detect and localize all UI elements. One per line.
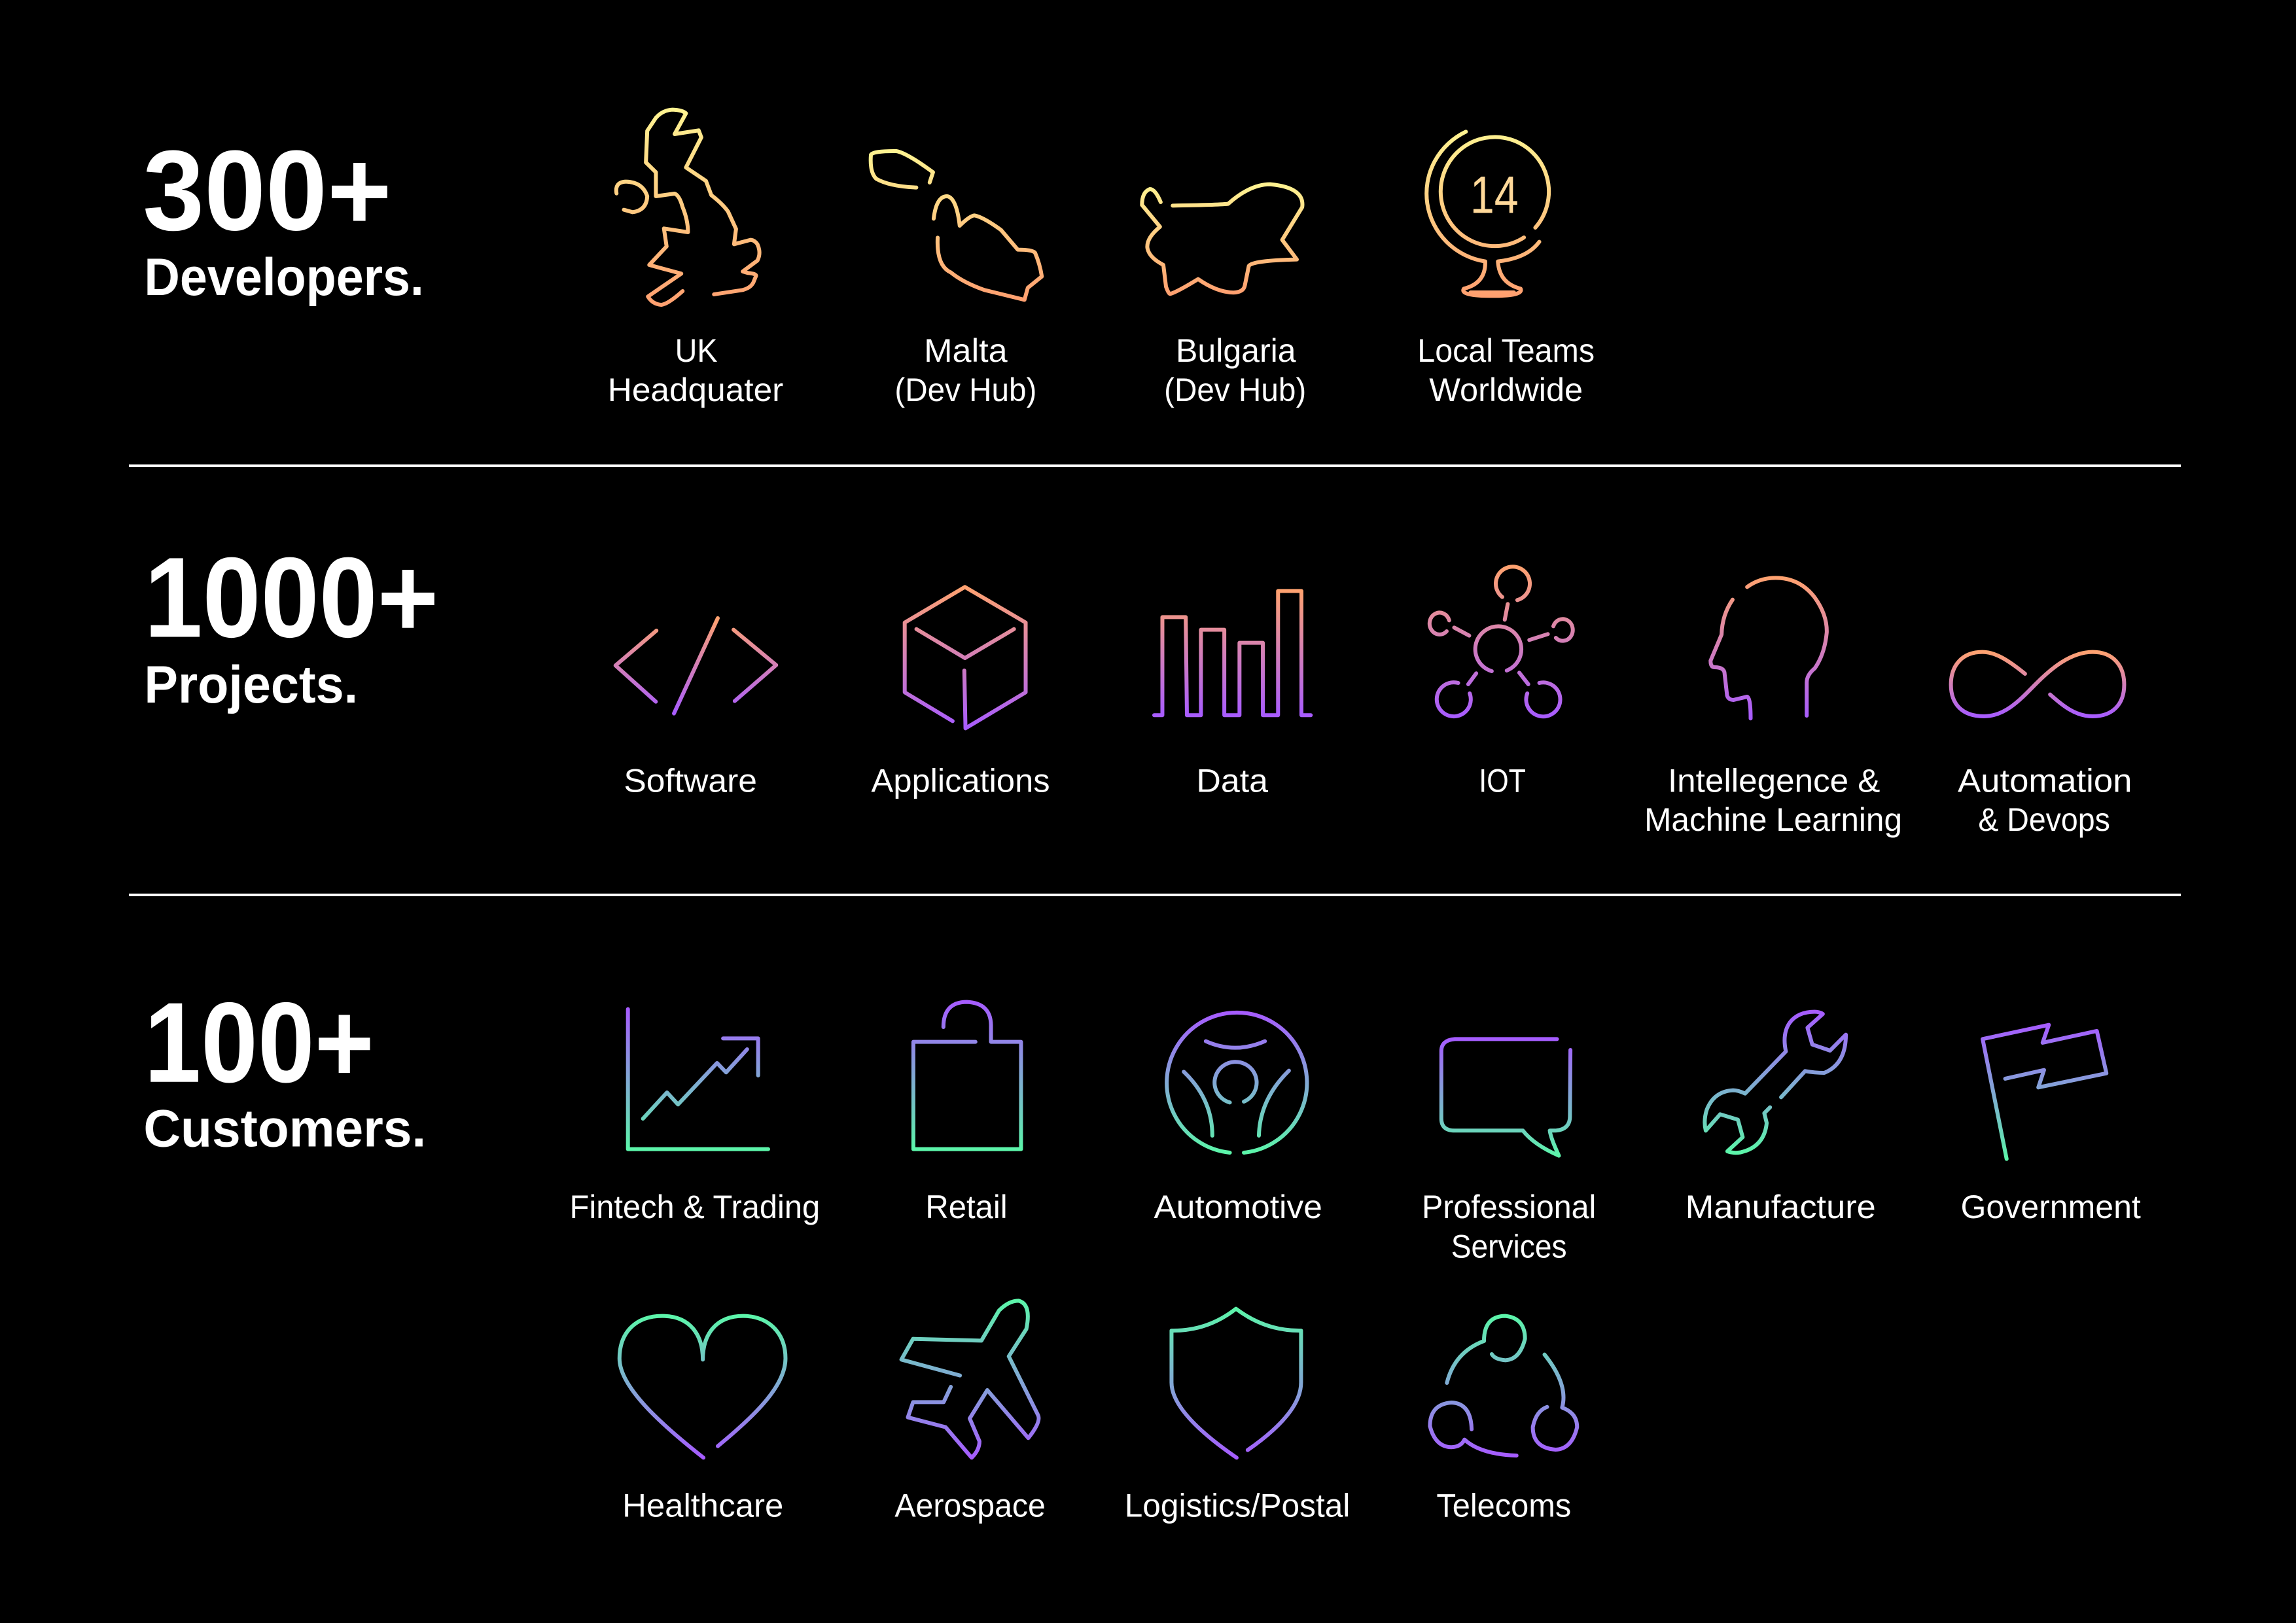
- label: Professional Services: Services: [1451, 1228, 1567, 1265]
- label: Malta (Dev Hub): Malta: [924, 332, 1008, 369]
- icon: flag: [1983, 1025, 2106, 1159]
- heading: Developers.: Developers.: [144, 248, 424, 307]
- icon: globe with 14: 14: [1470, 166, 1519, 225]
- label: UK Headquater: UK: [675, 332, 718, 369]
- label: Software: Software: [624, 763, 757, 799]
- icon: shopping bag: [913, 1002, 1021, 1149]
- heading: 1000+: 1000+: [144, 533, 438, 661]
- label: IOT: IOT: [1479, 763, 1526, 799]
- label: Intellegence & Machine Learning: Intellegence &: [1668, 763, 1880, 799]
- label: Local Teams Worldwide: [1417, 332, 1595, 408]
- icon: UK map: [616, 110, 760, 305]
- section: developers: [143, 110, 1595, 408]
- label: Local Teams Worldwide: Local Teams: [1417, 332, 1595, 369]
- divider: [129, 894, 2181, 896]
- label: Data: Data: [1196, 763, 1268, 799]
- label: Retail: Retail: [925, 1189, 1008, 1225]
- icon: globe with 14: [1426, 131, 1549, 296]
- icon: speech bubble: [1441, 1039, 1570, 1156]
- label: Bulgaria (Dev Hub): (Dev Hub): [1164, 372, 1306, 408]
- icon: Malta map: [871, 151, 1042, 300]
- label: Government: Government: [1961, 1189, 2141, 1225]
- label: Manufacture: Manufacture: [1686, 1189, 1876, 1225]
- icon: cube: [905, 587, 1026, 728]
- label: Aerospace: Aerospace: [894, 1487, 1046, 1524]
- label: Fintech & Trading: Fintech & Trading: [570, 1189, 820, 1225]
- icon: code brackets: [616, 618, 776, 714]
- label: Logistics/Postal: Logistics/Postal: [1125, 1487, 1350, 1524]
- icon: rising chart: [628, 1009, 768, 1149]
- label: Bulgaria (Dev Hub): Bulgaria: [1176, 332, 1296, 369]
- icon: infinity: [1951, 652, 2124, 716]
- label: Automation & Devops: & Devops: [1978, 801, 2110, 838]
- heading: 100+: 100+: [144, 979, 374, 1106]
- icon: steering wheel: [1167, 1013, 1307, 1153]
- label: Malta (Dev Hub): [894, 332, 1036, 408]
- label: Professional Services: Professional: [1422, 1189, 1596, 1225]
- label: Professional Services: [1422, 1189, 1596, 1265]
- label: Automation & Devops: Automation: [1958, 763, 2132, 799]
- label: Automation & Devops: [1958, 763, 2132, 838]
- label: Local Teams Worldwide: Worldwide: [1429, 372, 1583, 408]
- label: Bulgaria (Dev Hub): [1164, 332, 1306, 408]
- icon: heart: [620, 1316, 785, 1457]
- label: UK Headquater: [608, 332, 783, 408]
- label: Automotive: Automotive: [1154, 1189, 1322, 1225]
- icon: telecom network: [1430, 1316, 1577, 1456]
- icon: Bulgaria map: [1142, 184, 1302, 294]
- label: Healthcare: Healthcare: [622, 1487, 783, 1524]
- icon: IOT network: [1430, 567, 1573, 716]
- icon: head: [1710, 578, 1827, 718]
- heading: 300+: 300+: [143, 126, 392, 254]
- divider: [129, 464, 2181, 467]
- section: customers: [143, 979, 2141, 1524]
- icon: wrench: [1704, 1012, 1846, 1153]
- heading: Projects.: Projects.: [144, 655, 358, 714]
- icon: shield: [1171, 1309, 1301, 1457]
- label: Applications: Applications: [872, 763, 1050, 799]
- label: Intellegence & Machine Learning: Machine Learning: [1644, 801, 1902, 838]
- icon: bar chart: [1154, 591, 1311, 715]
- label: Intellegence & Machine Learning: [1644, 763, 1902, 838]
- label: UK Headquater: Headquater: [608, 372, 783, 408]
- label: Telecoms: Telecoms: [1436, 1487, 1571, 1524]
- section: projects: [144, 533, 2132, 838]
- label: Malta (Dev Hub): (Dev Hub): [894, 372, 1036, 408]
- heading: Customers.: Customers.: [143, 1099, 426, 1158]
- icon: airplane: [902, 1300, 1038, 1457]
